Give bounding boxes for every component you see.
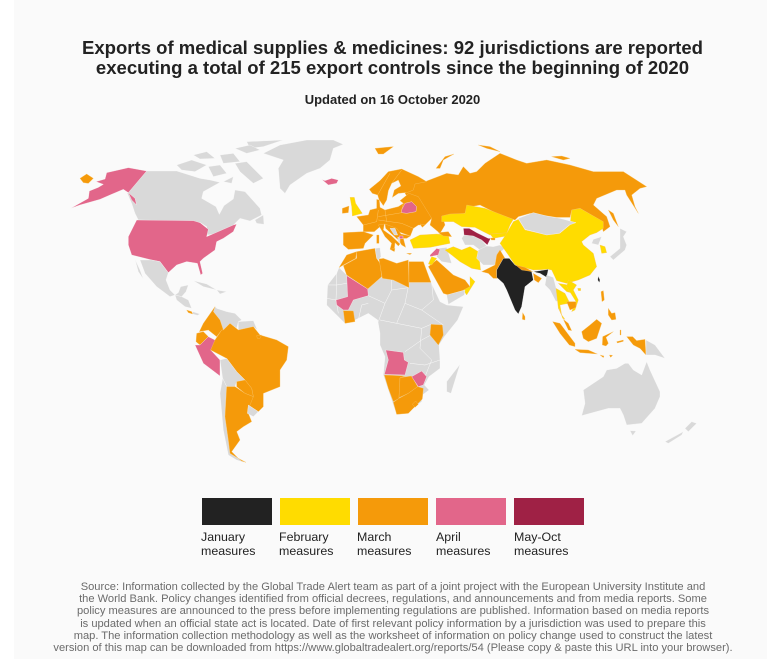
source note: the World Bank. Policy changes identified from official decrees, regulations, and announcements and from media reports. Some [79,593,707,605]
map: South America [195,307,288,463]
source note: is updated when an official state act is located. Date of first relevant policy information by a jurisdiction was used to prepare this [80,618,706,630]
title [82,37,703,78]
legend: April [436,498,506,558]
map: Australia and New Zealand [582,362,697,443]
source note: version of this map can be downloaded from https://www.globaltradealert.org/reports/54 (Please copy & paste this URL into your browser). [53,642,733,654]
text: February [279,530,329,544]
map: Russia and Arctic islands [375,145,647,233]
title: executing a total of 215 export controls since the beginning of 2020 [96,56,689,78]
source note: Source: Information collected by the Global Trade Alert team as part of a joint project with the European University Institute and [81,581,705,593]
legend: January [201,498,272,558]
source note [53,581,733,654]
map: Europe and the Levant [342,169,452,265]
map: Asia [442,205,627,320]
map: Southeast Asia [553,291,665,358]
title: Exports of medical supplies & medicines: 92 jurisdictions are reported [82,37,703,58]
text: measures [279,544,333,558]
text: measures [357,544,411,558]
text: March [357,530,391,544]
map: Alaska, USA, Mexico and Central America [71,168,237,315]
map: Africa [327,248,475,414]
source note: policy measures are announced to the press before implementing regulations are published. Information based on media reports [77,605,709,617]
subtitle: update date: Updated on 16 October 2020 [305,92,480,107]
legend: February [279,498,350,558]
legend: March [357,498,428,558]
text: measures [201,544,255,558]
text: January [201,530,245,544]
map: Canada, Greenland and Iceland [127,140,343,235]
text: May-Oct [514,530,561,544]
source note: map. The information collection methodology as well as the worksheet of information on policy change used to construct the latest [74,630,712,642]
legend: May-Oct [514,498,584,558]
text: April [436,530,461,544]
text: measures [514,544,568,558]
text: measures [436,544,490,558]
